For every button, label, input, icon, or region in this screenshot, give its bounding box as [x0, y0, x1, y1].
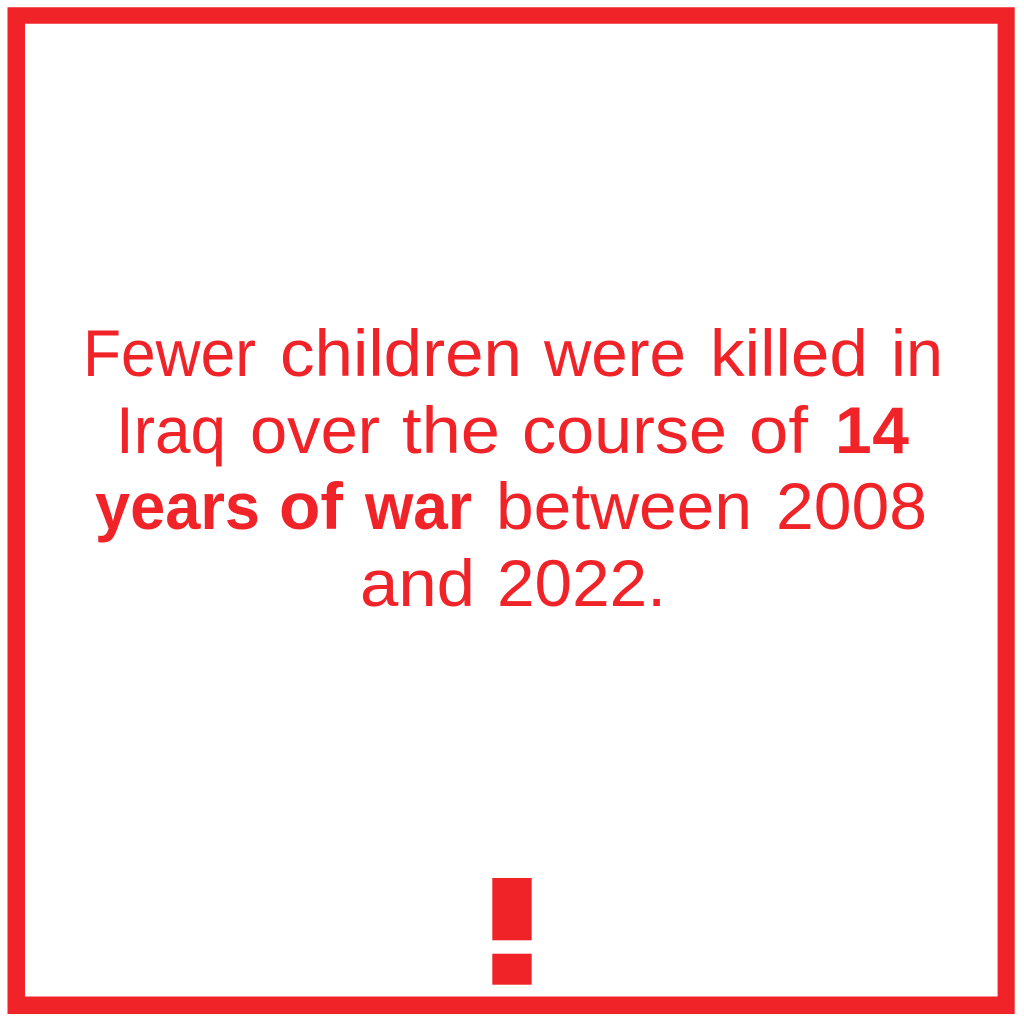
icon: exclamation mark [492, 878, 532, 985]
main statement text: over [250, 393, 380, 467]
main statement text: 2008 [776, 469, 927, 543]
main statement text: Fewer [83, 316, 256, 390]
main statement text: course [522, 393, 727, 467]
main statement text: 14 [835, 393, 909, 467]
main statement text: of [279, 469, 344, 543]
main statement text: the [402, 393, 500, 467]
main statement text: Iraq [116, 393, 226, 467]
main statement text: war [364, 469, 472, 543]
main statement text: between [496, 469, 752, 543]
main statement text: and [360, 546, 475, 620]
main statement text: killed [710, 316, 868, 390]
main statement text: children [280, 316, 522, 390]
main statement text [83, 316, 943, 620]
main statement text: in [891, 316, 943, 390]
main statement text: of [749, 393, 809, 467]
main statement text: 2022. [497, 546, 666, 620]
main statement text: were [543, 316, 686, 390]
main statement text: years [95, 469, 260, 543]
